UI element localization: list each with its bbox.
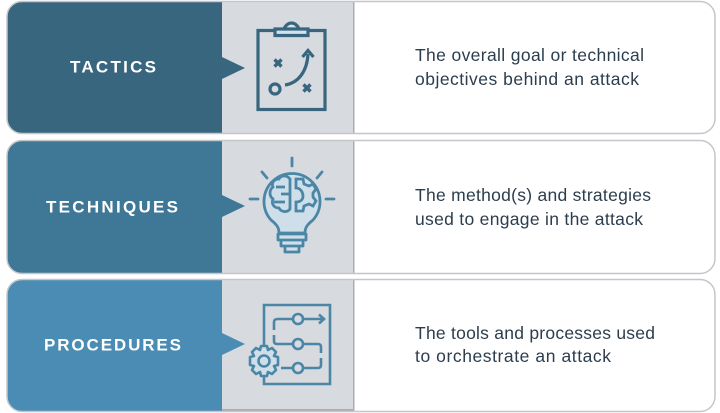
text: procedures description: The tools and processes used: [415, 323, 655, 343]
text: procedures description line 2: to orchestrate an attack: [415, 346, 611, 366]
panel: procedures: [7, 280, 715, 412]
text: tactics description line 2: objectives behind an attack: [415, 69, 639, 89]
arrow: techniques pointer: [222, 195, 245, 217]
text: techniques description line 2: used to engage in the attack: [415, 209, 643, 229]
heading: procedures: PROCEDURES: [44, 336, 181, 354]
icon: clipboard with play diagram: [258, 23, 325, 110]
text: techniques description: The method(s) and strategies: [415, 185, 651, 205]
icon: light bulb with brain and gear: [250, 158, 334, 252]
arrow: procedures pointer: [222, 333, 245, 355]
text: tactics description: The overall goal or technical: [415, 45, 644, 65]
panel: techniques: [7, 140, 715, 274]
heading: techniques: TECHNIQUES: [46, 198, 178, 216]
arrow: tactics pointer: [222, 57, 245, 79]
panel: tactics: [7, 2, 715, 134]
icon: process flow document with gear: [250, 305, 330, 384]
heading: tactics: TACTICS: [70, 58, 156, 76]
